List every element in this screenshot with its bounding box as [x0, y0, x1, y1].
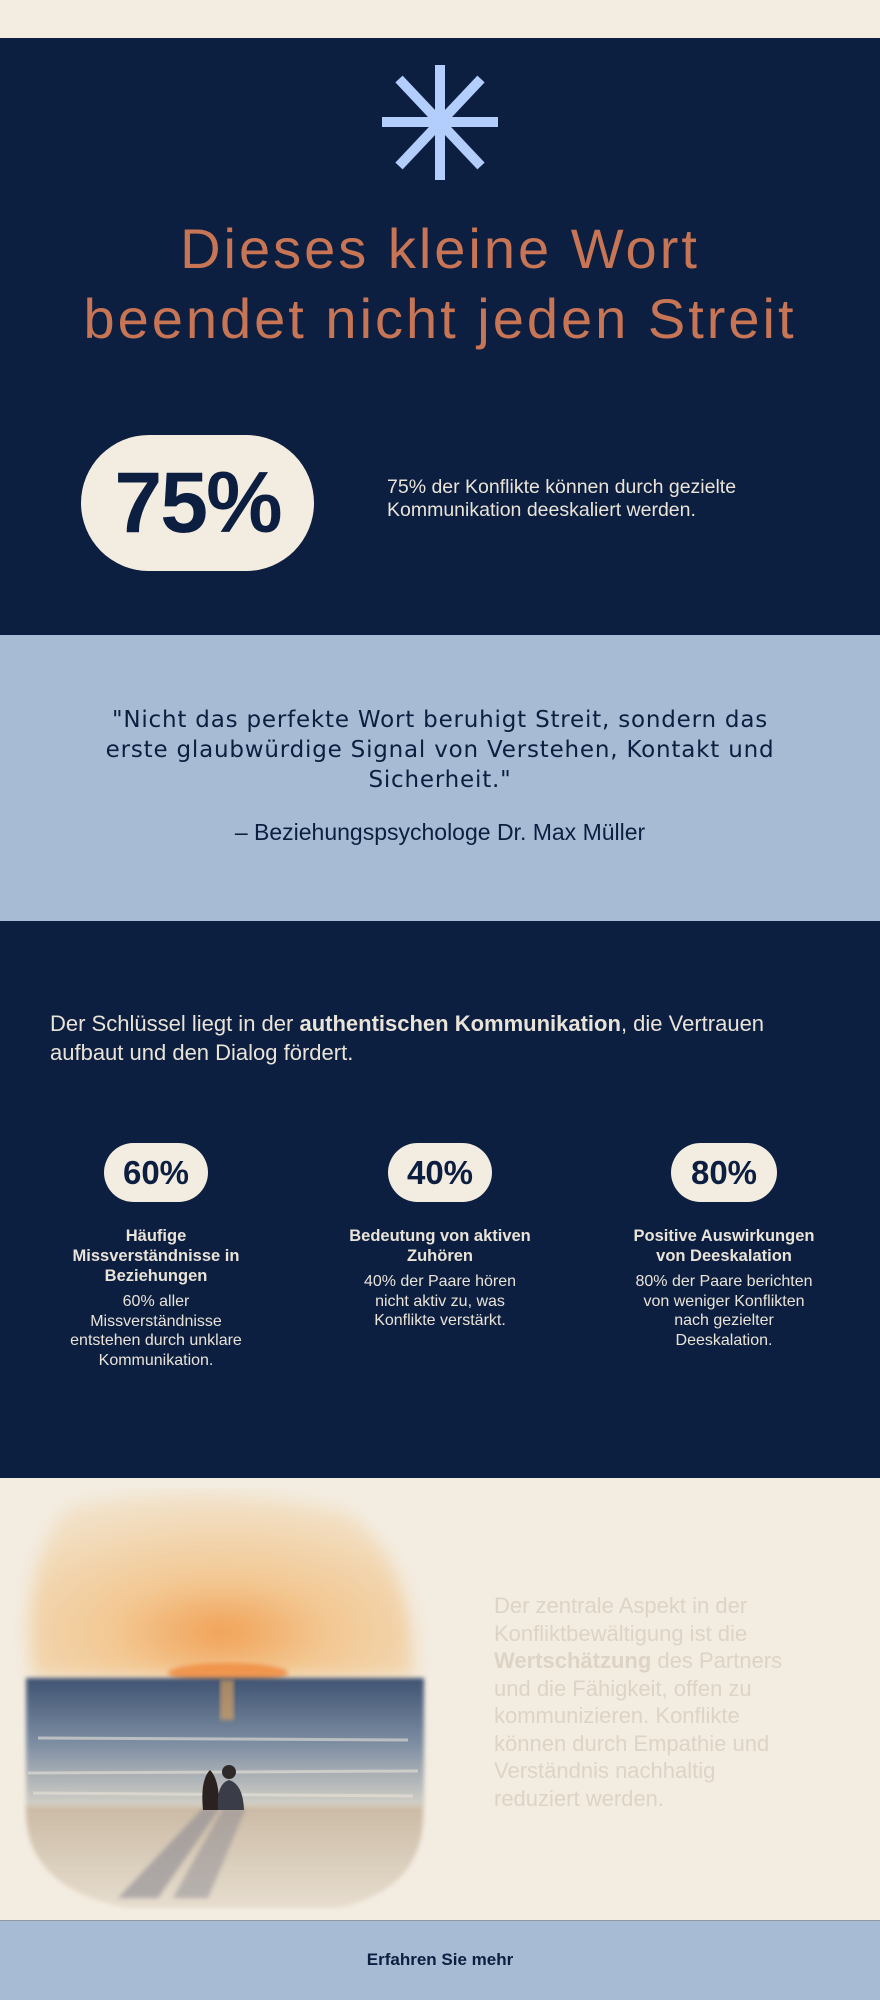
stat column 60%: Missverständnisse — [90, 1312, 222, 1330]
panel: illustration and text — [0, 1478, 880, 1920]
stat column 40%: Konflikte verstärkt. — [374, 1312, 506, 1329]
stat column 60% — [70, 1143, 242, 1368]
footer — [0, 1920, 880, 2000]
stat pill 75% — [81, 435, 314, 571]
stat column 80%: 80% — [691, 1154, 757, 1190]
stat column 40%: 40% der Paare hören — [364, 1273, 516, 1290]
stat column 40%: Bedeutung von aktiven Zuhören — [349, 1227, 531, 1265]
illustration: couple at sunset beach — [22, 1490, 428, 1908]
panel: quote — [0, 635, 880, 921]
top band — [0, 0, 880, 38]
stat pill 75%: 75% — [114, 454, 281, 550]
stat column 60%: 60% — [123, 1154, 189, 1190]
quote author: – Beziehungspsychologe Dr. Max Müller — [235, 819, 645, 845]
icon: asterisk — [382, 65, 498, 180]
footer link text: Erfahren Sie mehr — [367, 1950, 513, 1969]
panel: hero — [0, 38, 880, 635]
text block: appreciation: Der zentrale Aspekt in der Konfliktbewältigung ist die Wertschätzung des Partners und die Fähigkeit, offen zu kommunizieren. Konflikte können durch Empathie und Verständnis nachhaltig reduziert werden. — [494, 1593, 782, 1810]
quote text: "Nicht das perfekte Wort beruhigt Streit, sondern das erste glaubwürdige Signal von Verstehen, Kontakt und Sicherheit." — [106, 707, 774, 793]
stat column 60%: Häufige — [126, 1227, 186, 1245]
stat text: 75% der Konflikte können durch gezielte Kommunikation deeskaliert werden. — [387, 476, 736, 521]
stat column 80%: 80% der Paare berichten von weniger Konflikten nach gezielter Deeskalation. — [636, 1273, 812, 1348]
title — [83, 217, 797, 350]
title: Dieses kleine Wort — [180, 217, 700, 280]
stat column 40% — [349, 1143, 531, 1329]
stat column 80%: Positive Auswirkungen von Deeskalation — [634, 1227, 814, 1265]
stat column 60%: Missverständnisse in Beziehungen — [73, 1247, 239, 1285]
stat column 60%: 60% aller — [123, 1293, 189, 1310]
panel: key stats — [0, 921, 880, 1478]
title: beendet nicht jeden Streit — [83, 287, 797, 350]
stat column 40%: nicht aktiv zu, was — [375, 1292, 505, 1310]
intro text: Der Schlüssel liegt in der authentischen Kommunikation, die Vertrauen aufbaut und den Dialog fördert. — [50, 1011, 764, 1065]
stat column 60%: entstehen durch unklare Kommunikation. — [70, 1332, 242, 1368]
stat column 40%: 40% — [407, 1154, 473, 1190]
stat column 80% — [634, 1143, 814, 1348]
